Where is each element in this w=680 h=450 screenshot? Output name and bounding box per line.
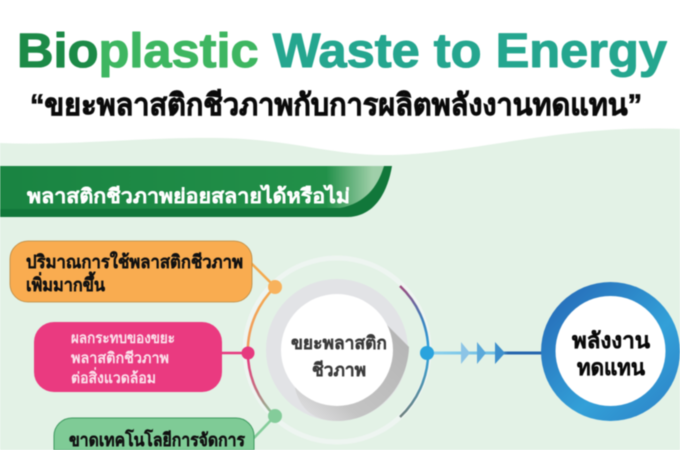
energy circle: ทดแทน	[577, 355, 645, 380]
energy circle	[541, 282, 680, 421]
energy circle: พลังงาน	[572, 328, 650, 353]
section banner: พลาสติกชีวภาพย่อยสลายได้หรือไม่	[27, 184, 350, 208]
title: Bioplastic Waste to Energy	[17, 25, 667, 78]
arrow: waste to energy	[420, 342, 543, 364]
box: environmental impact: พลาสติกชีวภาพ	[71, 349, 169, 367]
outer pale ring	[245, 258, 429, 442]
connector arc: left side	[248, 287, 275, 416]
box: environmental impact	[34, 322, 254, 392]
center circle: bioplastic waste	[266, 279, 409, 421]
center circle: bioplastic waste: ขยะพลาสติก	[291, 333, 387, 353]
box: environmental impact: ผลกระทบของขยะ	[71, 330, 175, 347]
subtitle: “ขยะพลาสติกชีวภาพกับการผลิตพลังงานทดแทน”	[30, 89, 642, 122]
box: increasing bioplastic use: ปริมาณการใช้พลาสติกชีวภาพ	[26, 251, 243, 272]
center circle: bioplastic waste: ชีวภาพ	[312, 360, 366, 380]
box: lack of waste technology	[54, 409, 282, 450]
connector arc: right side	[400, 286, 428, 417]
box: lack of waste technology: ขาดเทคโนโลยีการจัดการ	[69, 429, 245, 450]
box: increasing bioplastic use	[10, 241, 282, 302]
box: environmental impact: ต่อสิ่งแวดล้อม	[71, 367, 156, 387]
box: increasing bioplastic use: เพิ่มมากขึ้น	[26, 271, 106, 295]
section banner	[0, 166, 392, 217]
wave background	[0, 128, 680, 450]
